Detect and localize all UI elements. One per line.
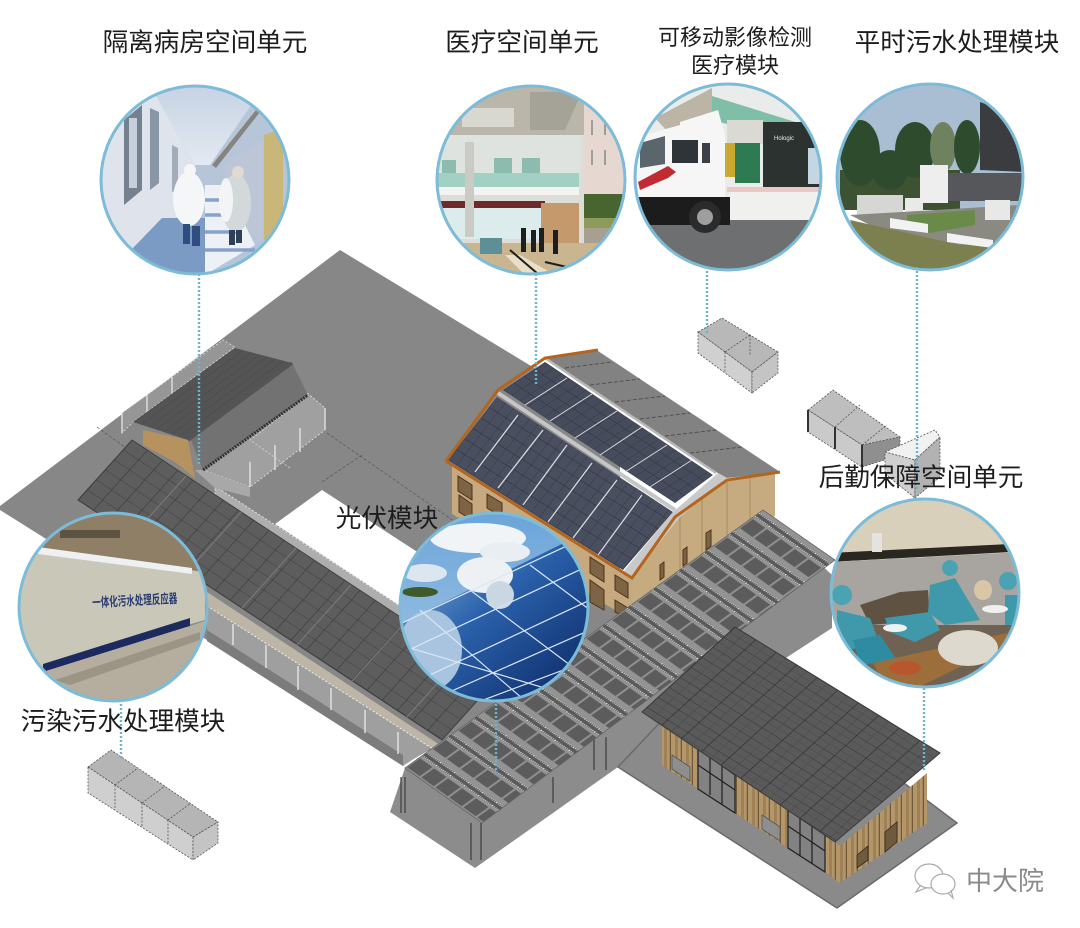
walkway platform	[390, 510, 832, 868]
right platform	[618, 680, 957, 908]
photo: contaminated sewage reactor	[20, 514, 206, 700]
walkway photovoltaic canopy	[405, 510, 835, 823]
photo: solar panels	[398, 510, 593, 705]
courtyard opening	[275, 490, 560, 658]
photo: routine sewage site	[838, 86, 1022, 268]
watermark	[915, 864, 1044, 898]
windows	[458, 476, 711, 618]
walkway columns	[401, 737, 606, 860]
timber wall	[143, 430, 195, 478]
ring: solar panels	[400, 513, 588, 701]
heading: medical unit: 医疗空间单元	[445, 28, 599, 57]
ground platform	[0, 250, 620, 765]
logistics building	[642, 627, 940, 883]
module: contaminated sewage box	[88, 750, 218, 860]
end wall openings	[857, 822, 897, 868]
medical unit building	[446, 350, 780, 620]
heading: photovoltaic module: 光伏模块	[336, 504, 438, 533]
ring: mobile imaging truck	[635, 84, 821, 270]
module: mobile imaging box	[698, 318, 778, 393]
icon: chat bubbles	[915, 864, 955, 898]
ring: logistics staff lounge	[831, 499, 1019, 687]
wing roof	[78, 440, 496, 740]
glazed terrace frames	[122, 340, 325, 497]
heading: mobile imaging module: 医疗模块	[691, 53, 779, 78]
orange eaves	[446, 350, 780, 578]
ring: contaminated sewage reactor	[19, 513, 207, 701]
heading: routine sewage module: 平时污水处理模块	[855, 28, 1059, 57]
heading: mobile imaging module: 可移动影像检测	[658, 25, 812, 50]
isolation ward wing	[78, 440, 496, 766]
photo: logistics staff lounge	[832, 500, 1018, 686]
timber wall bays	[662, 725, 698, 789]
photo: mobile imaging truck: Hologic	[774, 136, 794, 142]
small isolation unit	[122, 340, 325, 497]
courtyard side rooms	[215, 486, 480, 675]
module: routine sewage boxes	[808, 390, 940, 498]
photo: medical hall	[435, 85, 630, 280]
upper roof	[133, 348, 292, 440]
front wall	[452, 464, 632, 620]
heading: mobile imaging module	[658, 25, 812, 78]
ring: routine sewage site	[837, 84, 1023, 270]
photo: isolation ward corridor	[100, 85, 290, 275]
photo: contaminated sewage reactor: 一体化污水处理反应器	[92, 591, 178, 610]
ring: medical hall	[437, 86, 625, 274]
wing plinth and walls	[207, 605, 450, 766]
heading: logistics unit: 后勤保障空间单元	[819, 463, 1023, 492]
heading: isolation ward unit: 隔离病房空间单元	[103, 28, 307, 57]
light strips	[498, 393, 675, 510]
leader lines	[121, 271, 924, 773]
lower solar array	[448, 397, 673, 570]
ring: isolation ward	[101, 86, 289, 274]
tiled roof	[642, 627, 940, 842]
wing beige eave strip	[207, 592, 440, 749]
upper solar array	[503, 362, 713, 503]
watermark: 中大院	[966, 866, 1044, 896]
glazed bays	[698, 749, 825, 872]
photo: mobile imaging truck	[636, 86, 820, 268]
lower roof	[190, 363, 308, 470]
grey roof	[545, 351, 780, 478]
doors	[672, 755, 780, 841]
heading: contaminated sewage module: 污染污水处理模块	[21, 707, 225, 736]
end wall	[632, 474, 775, 612]
